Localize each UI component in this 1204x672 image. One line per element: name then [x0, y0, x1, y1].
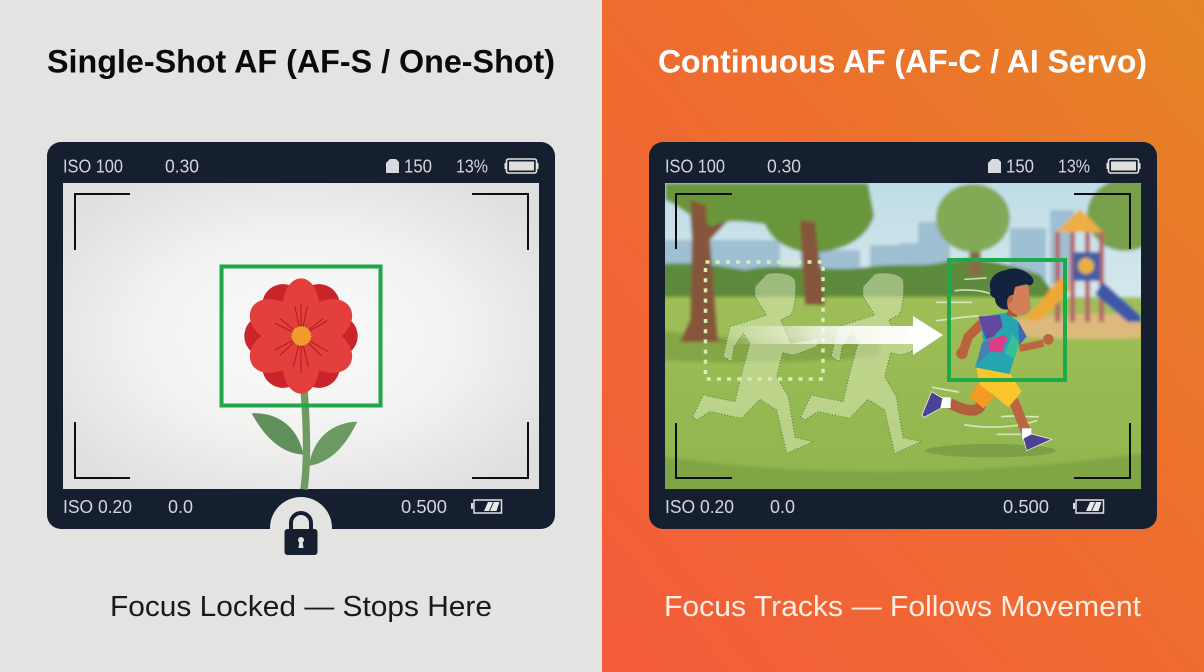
- flower leaves: [252, 413, 357, 466]
- sandy playground ground: [1005, 314, 1141, 339]
- flower centre: [292, 327, 311, 345]
- panel: continuous background: [602, 0, 1204, 672]
- top status readouts: ISO 100: [63, 156, 123, 176]
- speed lines: [932, 278, 1038, 434]
- corner brackets: [676, 194, 1130, 478]
- flower illustration: [242, 277, 360, 489]
- rear arm: [963, 323, 982, 353]
- icon: low battery: [1073, 500, 1104, 513]
- motion arrow: [725, 316, 943, 355]
- caption: focus tracks: Focus Tracks — Follows Movement: [664, 591, 1141, 623]
- icon: padlock: [284, 513, 318, 555]
- icon: memory card: [988, 159, 1001, 173]
- viewfinder frame: [649, 142, 1157, 529]
- top-right foliage: [1084, 183, 1141, 253]
- grass: [665, 294, 1141, 474]
- front leg: [1013, 400, 1026, 432]
- left tree: [680, 214, 728, 344]
- bushes: [660, 259, 1060, 300]
- shorts: [976, 367, 1022, 407]
- flower back petals: [244, 277, 358, 395]
- running child: [922, 268, 1056, 457]
- middle tree trunk: [800, 220, 825, 305]
- heading: single-shot AF: Single-Shot AF (AF-S / One-Shot): [47, 44, 555, 80]
- back leg: [950, 397, 981, 410]
- front sock: [1022, 428, 1031, 439]
- right tree: [968, 245, 982, 275]
- scene background, blurred: [660, 179, 1163, 495]
- panel: single-shot viewfinder: [47, 142, 555, 555]
- bottom status readouts: ISO 0.20: [665, 497, 734, 517]
- ghost runner 1: [693, 273, 820, 453]
- flower front petals: [242, 278, 360, 394]
- playground structure: [1023, 209, 1141, 322]
- top status readouts: [665, 156, 1090, 176]
- top status readouts: 0.30: [767, 156, 801, 176]
- green focus box, tracking: [949, 260, 1065, 380]
- top status readouts: ISO 100: [665, 156, 725, 176]
- hair: [990, 268, 1033, 310]
- bottom status readouts: 0.500: [401, 497, 447, 517]
- flower petal veins: [275, 303, 328, 373]
- sky: [660, 180, 1150, 305]
- bottom status readouts: [63, 497, 447, 517]
- panel: single-shot background: [0, 0, 602, 672]
- top status readouts: 150: [404, 156, 432, 176]
- viewfinder frame: [47, 142, 555, 529]
- dark grass foreground: [665, 453, 1141, 489]
- top status readouts: 13%: [1058, 156, 1090, 176]
- corner brackets: [75, 194, 528, 478]
- dotted previous focus box: [706, 262, 823, 379]
- front shoe: [1023, 434, 1052, 451]
- tree canopy: [665, 183, 874, 253]
- ghost runners and tracking: [693, 273, 820, 453]
- bottom status readouts: ISO 0.20: [63, 497, 132, 517]
- lock notch: [270, 497, 332, 530]
- green focus box, locked: [222, 266, 380, 406]
- heading: continuous AF: Continuous AF (AF-C / AI Servo): [658, 44, 1147, 80]
- back shoe: [922, 392, 943, 417]
- top status readouts: 13%: [456, 156, 488, 176]
- park scene: [660, 179, 1163, 495]
- distant buildings: [665, 209, 1075, 286]
- top status readouts: 150: [1006, 156, 1034, 176]
- bottom status readouts: 0.500: [1003, 497, 1049, 517]
- flower stem: [304, 389, 307, 489]
- neck: [1007, 308, 1018, 317]
- top status readouts: [63, 156, 488, 176]
- ground shadow: [926, 444, 1056, 457]
- bottom status readouts: [665, 497, 1049, 517]
- bottom status readouts: 0.0: [168, 497, 193, 517]
- viewfinder image area: [63, 183, 539, 489]
- shirt: [975, 313, 1027, 374]
- icon: memory card: [386, 159, 399, 173]
- bottom status readouts: 0.0: [770, 497, 795, 517]
- top status readouts: 0.30: [165, 156, 199, 176]
- icon: full battery: [504, 159, 538, 173]
- panel: continuous viewfinder: [649, 142, 1163, 529]
- back sock: [940, 397, 951, 408]
- caption: focus locked: Focus Locked — Stops Here: [110, 591, 492, 623]
- ghost runner 2: [801, 273, 928, 453]
- icon: full battery: [1106, 159, 1140, 173]
- icon: low battery: [471, 500, 502, 513]
- face: [1007, 285, 1031, 315]
- front arm: [1019, 343, 1043, 348]
